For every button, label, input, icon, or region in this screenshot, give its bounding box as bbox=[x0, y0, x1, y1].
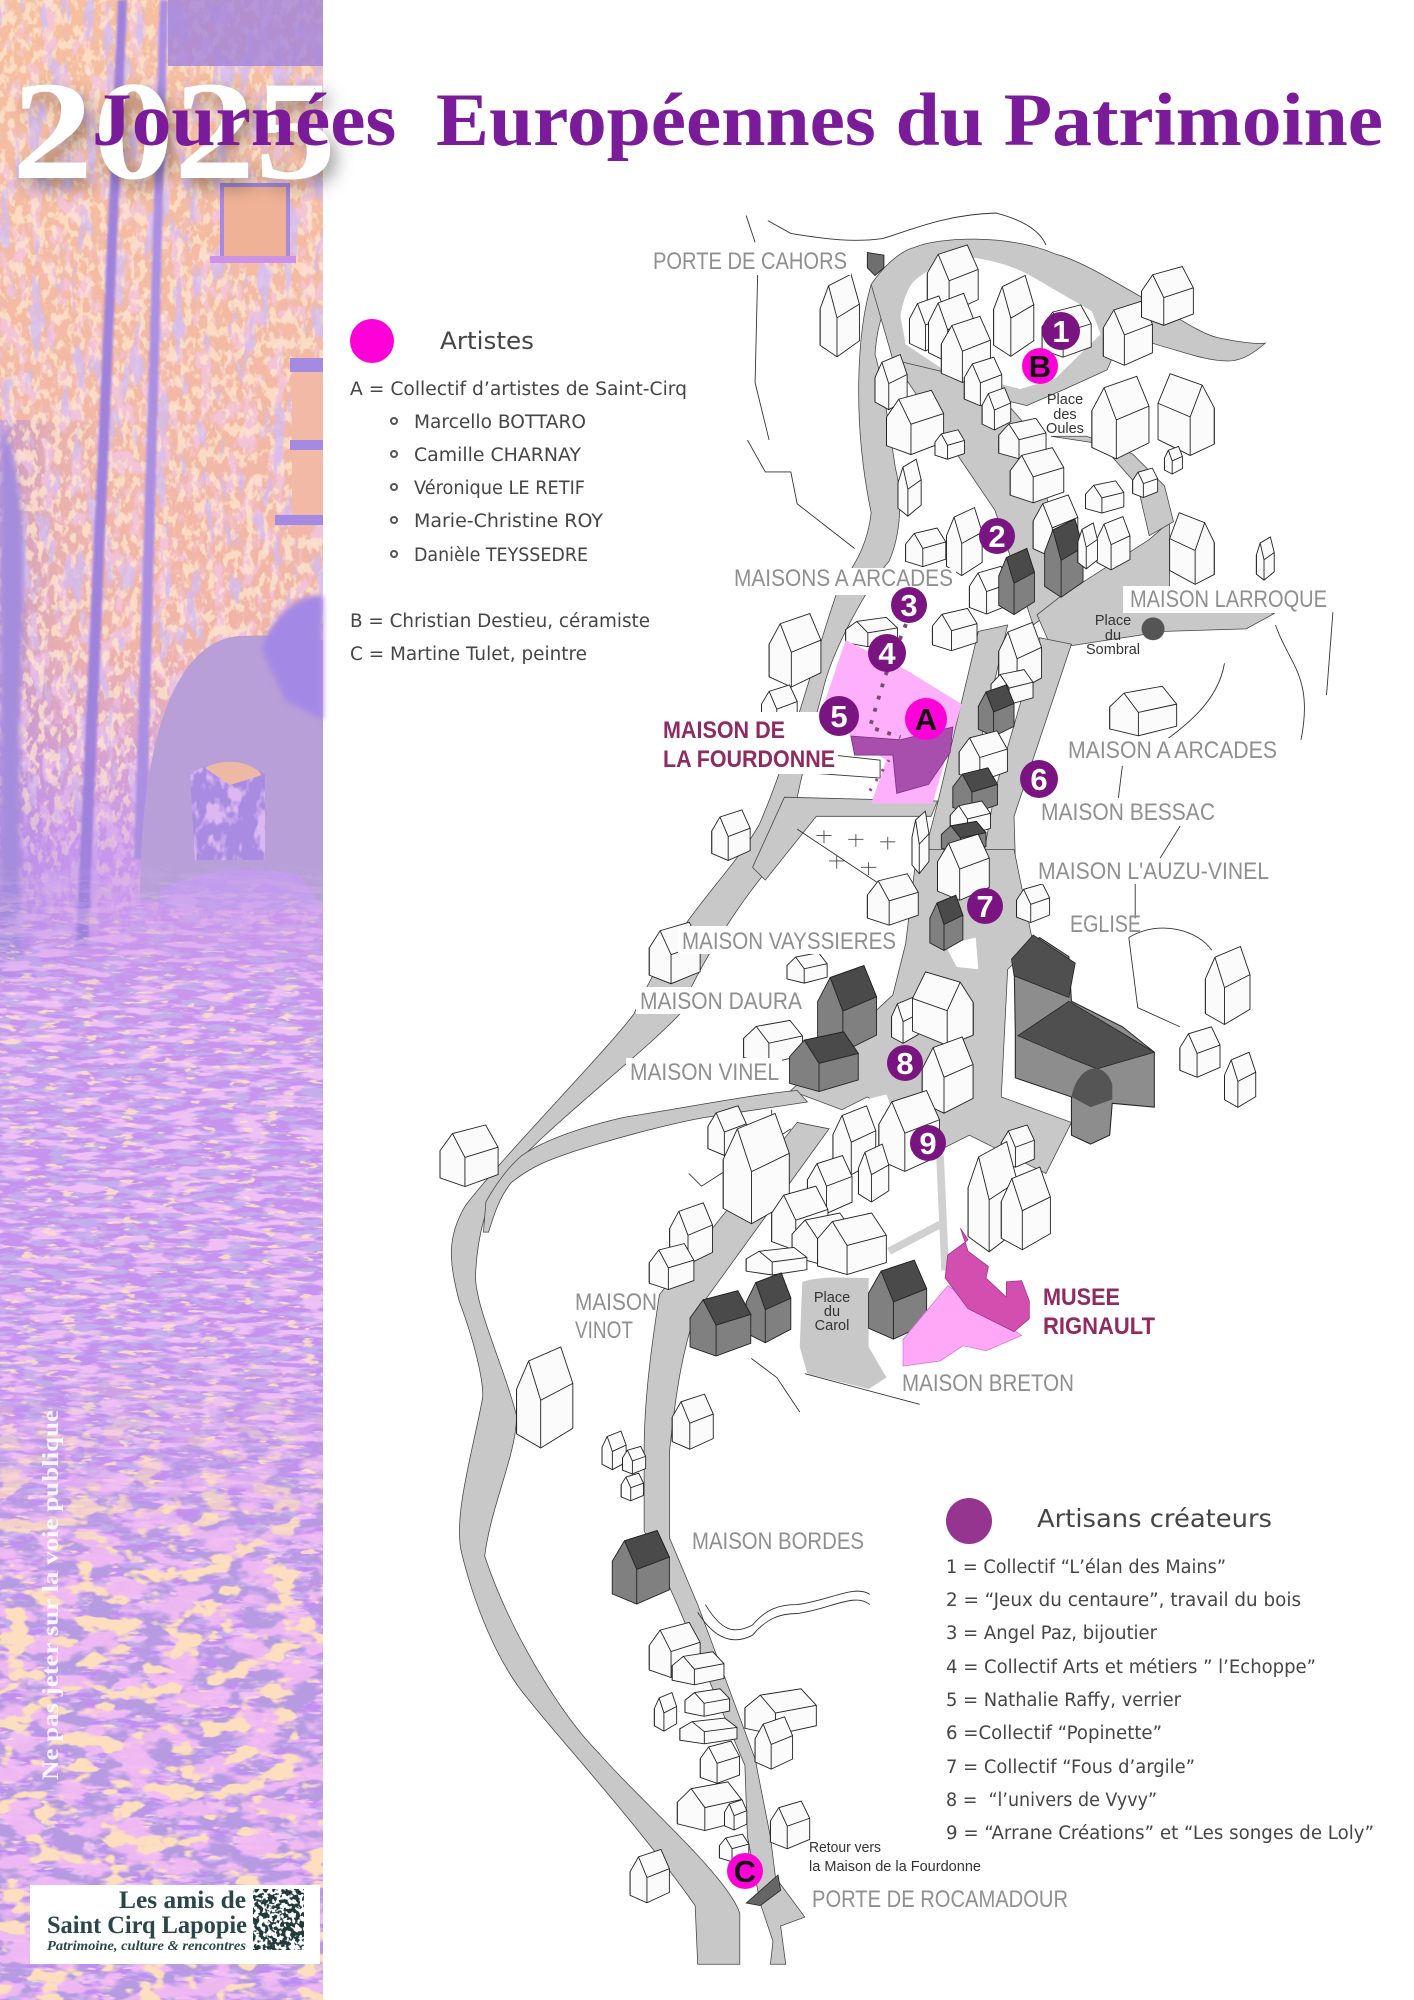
road: central hub bbox=[791, 849, 1071, 1173]
label: retour vers la Maison de la Fourdonne: la Maison de la Fourdonne bbox=[809, 1859, 981, 1875]
legend entry A: A = Collectif d’artistes de Saint-Cirq bbox=[350, 379, 687, 400]
label: Musée Rignault bbox=[1043, 1284, 1155, 1340]
legend heading: Artistes: Artistes bbox=[440, 327, 534, 355]
marker 8: 8 bbox=[896, 1046, 914, 1081]
thin terrain lines bbox=[689, 213, 1333, 1640]
legend entries 1 to 9 bbox=[946, 1557, 1374, 1844]
legend entries 1 to 9: 9 = “Arrane Créations” et “Les songes de Loly” bbox=[946, 1823, 1374, 1844]
legend entries 1 to 9: 2 = “Jeux du centaure”, travail du bois bbox=[946, 1590, 1301, 1611]
marker C: C bbox=[734, 1854, 756, 1889]
marker B: B bbox=[1029, 349, 1051, 384]
marker A: A bbox=[915, 702, 937, 737]
road: lanes south bbox=[912, 625, 1008, 901]
logo: Les amis de Saint Cirq Lapopie: Saint Cirq Lapopie bbox=[47, 1912, 247, 1939]
marker 9: 9 bbox=[919, 1126, 937, 1161]
marker 5: 5 bbox=[830, 699, 848, 734]
houses: southern street bbox=[602, 1431, 816, 1906]
label: Place des Oules: des bbox=[1053, 407, 1077, 423]
label: Maison Daura: MAISON DAURA bbox=[640, 988, 802, 1015]
marker 2: 2 bbox=[988, 519, 1006, 554]
label: Maison de la Fourdonne bbox=[660, 712, 838, 774]
vertical note: Ne pas jeter sur la voie publique bbox=[38, 1410, 63, 1780]
label: Maison Vinot: VINOT bbox=[575, 1317, 633, 1344]
legend entries 1 to 9: 4 = Collectif Arts et métiers ” l’Echoppe” bbox=[946, 1657, 1316, 1678]
label: Eglise: EGLISE bbox=[1070, 911, 1141, 938]
label: Musée Rignault: MUSEE bbox=[1043, 1284, 1120, 1311]
marker C bbox=[727, 1853, 763, 1889]
legend heading: Artisans créateurs: Artisans créateurs bbox=[1037, 1504, 1272, 1533]
houses: southern centre bbox=[440, 922, 1050, 1449]
road: south-west branch bbox=[483, 1091, 807, 1232]
legend entries 1 to 9: 7 = Collectif “Fous d’argile” bbox=[946, 1757, 1195, 1778]
road: main southern street bbox=[644, 1122, 829, 1964]
marker 9 bbox=[910, 1125, 946, 1161]
place du Carol bbox=[800, 1278, 886, 1389]
logo: Les amis de Saint Cirq Lapopie: Les amis de bbox=[119, 1887, 246, 1914]
legend dot: artisans bbox=[946, 1498, 992, 1544]
label: Place du Carol: du bbox=[824, 1304, 840, 1320]
highlight: musée Rignault bbox=[903, 1228, 1029, 1366]
legend entries 1 to 9: 5 = Nathalie Raffy, verrier bbox=[946, 1690, 1181, 1711]
label: Place du Sombral: du bbox=[1105, 628, 1121, 644]
legend members list bbox=[391, 412, 604, 566]
label: Porte de Cahors: PORTE DE CAHORS bbox=[653, 248, 847, 275]
title: Journées Européennes du Patrimoine bbox=[92, 79, 1383, 162]
marker 5 bbox=[819, 696, 859, 736]
legend entries 1 to 9: 6 =Collectif “Popinette” bbox=[946, 1723, 1162, 1744]
label: Porte de Rocamadour: PORTE DE ROCAMADOUR bbox=[812, 1886, 1068, 1913]
marker 3 bbox=[891, 587, 927, 623]
label: Place du Carol bbox=[814, 1290, 850, 1334]
marker 3: 3 bbox=[900, 588, 918, 623]
marker 1 bbox=[1042, 312, 1080, 350]
road: long western road bbox=[451, 284, 901, 1964]
church bbox=[1011, 935, 1154, 1144]
label: Maison Vinot bbox=[575, 1289, 657, 1344]
label: Maison Bordes: MAISON BORDES bbox=[692, 1528, 864, 1555]
label: Maison Vinot: MAISON bbox=[575, 1289, 657, 1316]
marker 4: 4 bbox=[878, 636, 896, 671]
legend members list: Marie-Christine ROY bbox=[414, 511, 604, 532]
legend dot: artistes bbox=[350, 319, 394, 363]
marker 7 bbox=[967, 888, 1003, 924]
legend entry C: C = Martine Tulet, peintre bbox=[350, 644, 587, 665]
label: Place du Sombral bbox=[1086, 613, 1140, 658]
marker 8 bbox=[887, 1045, 923, 1081]
logo emblem bbox=[253, 1889, 304, 1950]
marker 7: 7 bbox=[976, 889, 994, 924]
marker 4 bbox=[868, 634, 906, 672]
legend entries 1 to 9: 1 = Collectif “L’élan des Mains” bbox=[946, 1557, 1226, 1578]
legend members list: Véronique LE RETIF bbox=[414, 478, 585, 499]
houses: northern quarter bbox=[820, 245, 1274, 651]
marker 2 bbox=[979, 518, 1015, 554]
legend entries 1 to 9: 8 = “l’univers de Vyvy” bbox=[946, 1790, 1157, 1811]
label: Maison Breton: MAISON BRETON bbox=[902, 1370, 1074, 1397]
label: Maison de la Fourdonne: LA FOURDONNE bbox=[663, 746, 835, 773]
label: Place du Sombral: Sombral bbox=[1086, 642, 1140, 658]
label: Place des Oules: Place bbox=[1047, 392, 1083, 408]
marker 6 bbox=[1020, 760, 1058, 798]
label: Maison Vinel: MAISON VINEL bbox=[630, 1059, 779, 1086]
legend: Artisans créateurs bbox=[946, 1498, 1374, 1844]
legend members list: Camille CHARNAY bbox=[414, 445, 582, 466]
marker A bbox=[905, 698, 947, 740]
road: curved lane east bbox=[1051, 436, 1173, 536]
label: Maison de la Fourdonne: MAISON DE bbox=[663, 717, 785, 744]
legend entry B: B = Christian Destieu, céramiste bbox=[350, 611, 650, 632]
label: Musée Rignault: RIGNAULT bbox=[1043, 1313, 1155, 1340]
label: Place du Carol: Carol bbox=[815, 1318, 849, 1334]
legend members list: Danièle TEYSSEDRE bbox=[414, 545, 588, 566]
label: Maisons à arcades: MAISONS A ARCADES bbox=[734, 565, 953, 592]
label: Maison Larroque: MAISON LARROQUE bbox=[1130, 586, 1327, 613]
village map bbox=[440, 213, 1333, 1964]
highlight: maison de la Fourdonne bbox=[825, 612, 962, 804]
legend: Artistes bbox=[350, 319, 687, 665]
label: Maison à arcades east: MAISON A ARCADES bbox=[1068, 737, 1277, 764]
label: Place des Oules bbox=[1046, 392, 1084, 437]
label: retour vers la Maison de la Fourdonne bbox=[809, 1840, 981, 1875]
road: place du Sombral bbox=[1037, 522, 1274, 647]
label: retour vers la Maison de la Fourdonne: Retour vers bbox=[809, 1840, 881, 1856]
road: top swoosh and place des Oules bbox=[871, 239, 1265, 406]
background photo panel: village street bbox=[0, 0, 323, 2000]
label: Maison Vayssières: MAISON VAYSSIERES bbox=[682, 928, 896, 955]
legend entries 1 to 9: 3 = Angel Paz, bijoutier bbox=[946, 1623, 1157, 1644]
legend members list: Marcello BOTTARO bbox=[414, 412, 586, 433]
marker 6: 6 bbox=[1030, 762, 1048, 797]
logo: Les amis de Saint Cirq Lapopie: Patrimoine, culture & rencontres bbox=[47, 1938, 246, 1953]
logo: Les amis de Saint Cirq Lapopie bbox=[30, 1885, 320, 1964]
label: Maison Bessac: MAISON BESSAC bbox=[1041, 799, 1215, 826]
marker 1: 1 bbox=[1052, 314, 1070, 349]
houses: middle quarter bbox=[712, 614, 1256, 1107]
year 2025: 2025 bbox=[12, 53, 336, 209]
road: central street north bbox=[893, 360, 1069, 625]
label: Place des Oules: Oules bbox=[1046, 421, 1084, 437]
label: Place du Carol: Place bbox=[814, 1290, 850, 1306]
label: Maison Lauzu-Vinel: MAISON L'AUZU-VINEL bbox=[1038, 858, 1269, 885]
label: Place du Sombral: Place bbox=[1095, 613, 1131, 629]
footpaths bbox=[889, 1156, 945, 1270]
marker B bbox=[1022, 348, 1058, 384]
